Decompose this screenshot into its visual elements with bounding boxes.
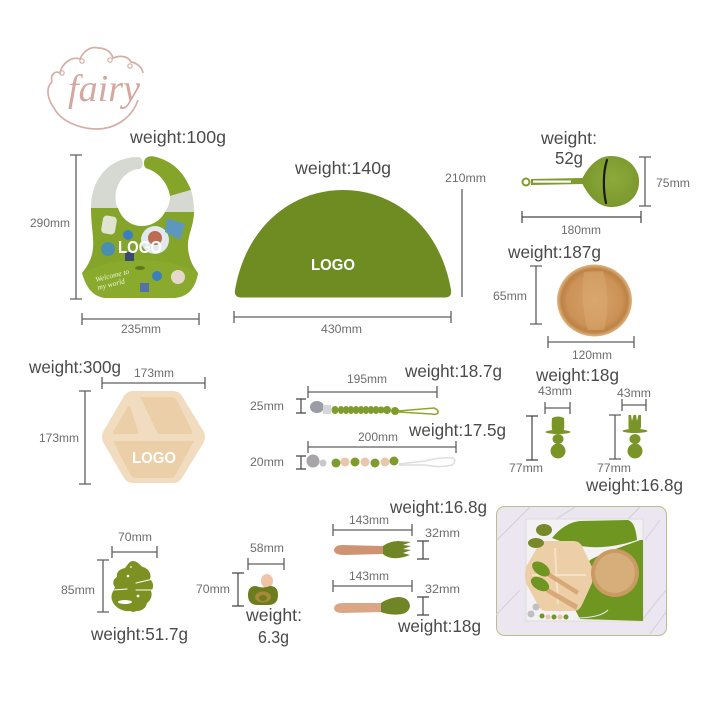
dimension: plate height: 173mm: [39, 433, 79, 445]
dimension: baby spoon width: [538, 386, 572, 414]
dimension: baby fork width: 43mm: [617, 388, 651, 400]
weight label: rattle: 52g: [555, 148, 583, 168]
weight label: pacifier: weight:: [245, 605, 302, 625]
placemat: [235, 190, 451, 298]
wooden bowl: [557, 264, 632, 336]
dimension: baby spoon height: 77mm: [509, 463, 543, 475]
dimension: placemat height: [445, 173, 486, 297]
dimension: rattle width: [522, 211, 641, 237]
bib: Welcome to: [94, 267, 130, 284]
wood-handled fork: [334, 541, 411, 558]
dimension: teether height: [61, 560, 109, 612]
baby fork: [622, 415, 648, 458]
dimension: rattle width: 180mm: [561, 225, 601, 237]
bib: my world: [96, 276, 126, 292]
weight label: bib: weight:100g: [129, 127, 226, 147]
dimension: bowl width: [548, 336, 634, 362]
dimension: teether width: 70mm: [118, 532, 152, 544]
wood-handled spoon: [334, 597, 410, 615]
dimension: wood fork length: [333, 515, 412, 536]
dimension: bowl height: [493, 266, 542, 324]
photo: boxed set: [496, 506, 666, 636]
dimension: bowl height: 65mm: [493, 291, 527, 303]
weight label: pacifier: 6.3g: [258, 627, 289, 647]
dimension: pacifier height: 70mm: [196, 584, 230, 596]
baby spoon: [546, 416, 570, 458]
pacifier: [248, 574, 278, 605]
dimension: rattle height: 75mm: [656, 178, 690, 190]
dimension: bib height: 290mm: [30, 218, 70, 230]
bib: [82, 156, 198, 298]
dimension: baby fork height: 77mm: [597, 463, 631, 475]
dimension: wood spoon length: [333, 571, 412, 592]
box: green mat underneath: [570, 540, 643, 621]
dimension: clip one height: 25mm: [250, 401, 284, 413]
dimension: bib width: 235mm: [121, 324, 161, 336]
bib: LOGO: [118, 237, 162, 257]
dimension: teether height: 85mm: [61, 585, 95, 597]
logo: fairy: fairy: [68, 68, 140, 110]
leaf teether: [111, 561, 154, 612]
dimension: bib height: [30, 155, 82, 299]
weight label: rattle: weight:: [540, 128, 597, 148]
dimension: baby fork height: [597, 415, 631, 475]
box: spoon and fork: [546, 572, 579, 610]
dimension: placemat height: 210mm: [445, 173, 486, 185]
weight label: wood fork: weight:16.8g: [389, 497, 487, 517]
dimension: plate width: [102, 368, 205, 389]
dimension: clip two height: 20mm: [250, 457, 284, 469]
dimension: plate width: 173mm: [134, 368, 174, 380]
dimension: clip two height: [250, 456, 306, 469]
dimension: wood fork head: [417, 528, 460, 559]
dimension: baby spoon height: [509, 416, 543, 475]
pacifier clip one: [310, 401, 438, 415]
box: teethers and beads: [536, 524, 552, 536]
dimension: plate height: [39, 391, 91, 484]
dimension: wood spoon length: 143mm: [349, 571, 389, 583]
dimension: bowl width: 120mm: [572, 350, 612, 362]
weight label: wood spoon: weight:18g: [397, 616, 481, 636]
dimension: wood spoon head: 32mm: [425, 584, 460, 596]
dimension: clip one length: [308, 374, 437, 398]
dimension: pacifier height: [196, 573, 244, 606]
placemat: LOGO: [311, 257, 355, 274]
weight label: baby spoon: weight:18g: [535, 365, 619, 385]
box: folded green bib: [552, 520, 637, 547]
dimension: rattle height: [639, 157, 690, 206]
dimension: wood fork head: 32mm: [425, 528, 460, 540]
hexagonal wooden plate: [102, 391, 205, 483]
dimension: clip two length: [308, 432, 456, 453]
weight label: placemat: weight:140g: [294, 158, 391, 178]
pacifier clip two: [306, 454, 455, 468]
dimension: wood fork length: 143mm: [349, 515, 389, 527]
weight label: rattle: [540, 128, 597, 168]
dimension: wood spoon head: [417, 584, 460, 615]
box: wooden bowl: [591, 549, 639, 597]
box: hexagon plate: [525, 541, 592, 611]
dimension: pacifier width: [248, 543, 284, 570]
logo: fairy: [48, 47, 143, 129]
dimension: placemat width: 430mm: [321, 324, 362, 336]
dimension: clip two length: 200mm: [358, 432, 398, 444]
hexagonal wooden plate: LOGO: [132, 450, 176, 467]
bib stickers: [101, 215, 185, 292]
weight label: bowl: weight:187g: [507, 242, 601, 262]
dimension: teether width: [112, 532, 157, 558]
weight label: hexagonal plate: weight:300g: [28, 357, 121, 377]
dimension: clip one length: 195mm: [347, 374, 387, 386]
weight label: baby fork: weight:16.8g: [585, 475, 683, 495]
weight label: clip one: weight:18.7g: [404, 361, 502, 381]
dimension: baby spoon width: 43mm: [538, 386, 572, 398]
rattle: [522, 156, 639, 207]
dimension: baby fork width: [617, 388, 651, 411]
dimension: bib width: [82, 313, 199, 336]
dimension: placemat width: [234, 311, 451, 336]
weight label: teether: weight:51.7g: [90, 624, 188, 644]
dimension: pacifier width: 58mm: [250, 543, 284, 555]
weight label: pacifier: [245, 605, 302, 647]
dimension: clip one height: [250, 399, 306, 413]
weight label: clip two: weight:17.5g: [408, 420, 506, 440]
